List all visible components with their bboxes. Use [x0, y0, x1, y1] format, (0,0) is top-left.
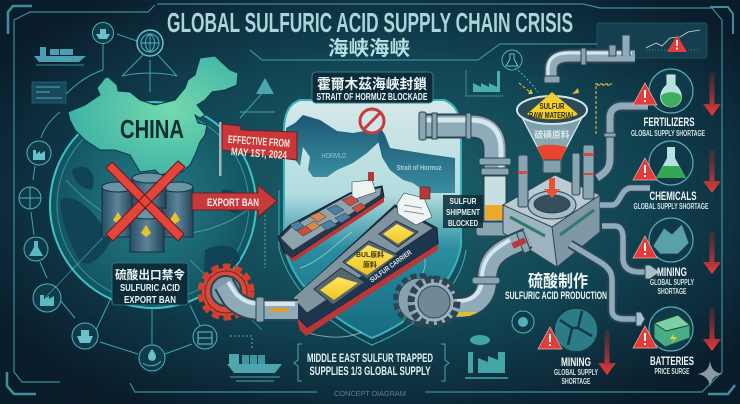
- label: sulfur shipment blocked: [443, 195, 483, 228]
- output: mining: [633, 218, 721, 296]
- label: MINING: [561, 357, 591, 369]
- icon: triangle hazard: [256, 78, 274, 94]
- container ship: [278, 172, 384, 262]
- icon: water hand node: [139, 345, 165, 371]
- containers: [290, 196, 366, 236]
- label: sulfuric acid production: [505, 271, 607, 302]
- flag: effective date: EFFECTIVE FROM: [228, 134, 290, 150]
- flag: effective date: MAY 1ST, 2024: [231, 146, 288, 162]
- arrow: export ban: [192, 185, 277, 217]
- arrow: down: [703, 73, 721, 116]
- pipe: mining: [602, 226, 660, 279]
- arrow: export ban: EXPORT BAN: [207, 197, 259, 209]
- icon: red X: [106, 161, 185, 241]
- label: sulfuric acid production: SULFURIC ACID PRODUCTION: [505, 290, 607, 302]
- pipes: output lines: [570, 106, 660, 326]
- label: FERTILIZERS: [644, 117, 695, 129]
- funnel: sulfur raw material: RAW MATERIAL: [529, 110, 575, 120]
- icon: factory top: [465, 70, 503, 96]
- icon: sparkle: [697, 361, 723, 387]
- label: [554, 357, 598, 386]
- icon: factory bottom: [465, 335, 508, 378]
- cargo hold: rear: [379, 221, 418, 247]
- network: left supply nodes: [19, 22, 282, 381]
- icon: tanker node: [72, 323, 98, 349]
- label: [650, 356, 694, 376]
- icon: cargo node: [193, 325, 217, 349]
- chimneys: [518, 145, 594, 207]
- label: sulfur shipment blocked: SULFUR: [450, 196, 476, 206]
- label: BATTERIES: [650, 356, 694, 368]
- icon: barrel back: [132, 173, 166, 208]
- output: chemicals: [633, 141, 721, 211]
- icon: chemical flask: [649, 141, 693, 185]
- subtitle: 海峡海峡: [328, 37, 410, 60]
- label: [650, 267, 694, 296]
- cargo hold: front: [314, 268, 365, 305]
- arrow: down: [703, 150, 721, 193]
- label: Hormuz: HORMUZ: [322, 153, 347, 160]
- pipe: chemicals: [600, 188, 650, 205]
- arrow: down: [703, 308, 721, 351]
- label: sulfur shipment blocked: SHIPMENT: [446, 207, 481, 217]
- hull name: SULFUR CARRIER: [369, 249, 413, 284]
- icon: warning: [667, 35, 687, 52]
- icon: document panel: [32, 82, 66, 103]
- icon: no-entry sign: [360, 109, 384, 133]
- oil barrels with red X: [102, 161, 193, 252]
- icon: flask node: [24, 237, 48, 261]
- label: Strait of Hormuz: Strait of Hormuz: [396, 165, 442, 172]
- icon: battery: [649, 307, 693, 351]
- icon: container ship bottom: [227, 354, 282, 381]
- icon: rocks: [649, 218, 693, 262]
- arrow: down: [598, 330, 616, 375]
- label: sulfuric acid production: 硫酸制作: [528, 271, 588, 291]
- label: sulfuric acid export ban: 硫酸出口禁令: [115, 267, 185, 282]
- caption: CONCEPT DIAGRAM: [334, 389, 406, 398]
- icon: warning: [633, 158, 657, 180]
- label: [634, 191, 709, 211]
- land: south coast: [378, 127, 455, 193]
- label: sulfuric acid export ban: SULFURIC ACID: [120, 282, 180, 294]
- icon: barrel front: [130, 209, 164, 252]
- icon: grey gear: [397, 277, 457, 325]
- pipe: reactor to gears: [434, 230, 531, 319]
- label: PRICE SURGE: [654, 367, 690, 376]
- cargo hold: centre: [343, 241, 398, 279]
- panel: price chart: [597, 23, 707, 58]
- icon: cracked rock: [554, 308, 598, 352]
- label: middle east sulfur trapped: [294, 344, 449, 381]
- pipe: hormuz top pipe: [419, 112, 514, 236]
- funnel: sulfur raw material: [517, 92, 587, 198]
- icon: flask circle: [502, 50, 522, 70]
- reactor block: [503, 145, 600, 267]
- reactor opening: [528, 191, 576, 219]
- icon: warning: [538, 327, 562, 349]
- label: sulfuric acid export ban: EXPORT BAN: [124, 294, 176, 306]
- label: CHEMICALS: [650, 191, 697, 203]
- panel: strait of Hormuz map: [279, 100, 466, 345]
- label: China: CHINA: [120, 114, 184, 144]
- label: SHORTAGE: [562, 377, 591, 386]
- icon: chemical plant node: [33, 284, 61, 312]
- pipe: fertilizers: [597, 106, 648, 178]
- cargo hold: centre: 原料: [363, 260, 377, 269]
- label: SHORTAGE: [658, 287, 687, 296]
- icon: globe node: [137, 30, 163, 56]
- map of China: [68, 56, 238, 175]
- label: strait of Hormuz blockade: [312, 72, 433, 103]
- icon: barrel right: [162, 182, 193, 237]
- pipe: gear to ship: [224, 282, 298, 322]
- label: [631, 117, 705, 138]
- icon: ship node: [92, 22, 114, 44]
- globe: [45, 102, 262, 330]
- flag: effective date: [219, 122, 297, 176]
- funnel: sulfur raw material: SULFUR: [540, 101, 564, 111]
- label: MINING: [657, 267, 687, 279]
- icon: warning: [633, 326, 657, 348]
- icon: factory node: [27, 141, 51, 165]
- icon: cargo ship top left: [34, 47, 86, 65]
- icon: barrel left: [102, 182, 133, 237]
- output: mining lower: [538, 308, 616, 386]
- output: fertilizers: [631, 69, 721, 138]
- land: north coast: [286, 115, 381, 177]
- icon: gear circle: [512, 311, 534, 333]
- icon: warning: [633, 83, 657, 105]
- label: sulfur shipment blocked: BLOCKED: [448, 218, 478, 228]
- icon: warning: [633, 236, 657, 258]
- output: batteries: [633, 307, 721, 376]
- label: sulfuric acid export ban: [112, 263, 188, 306]
- label: strait of Hormuz blockade: 霍爾木茲海峽封鎖: [317, 76, 427, 92]
- funnel: sulfur raw material: 硫磺原料: [534, 129, 570, 140]
- arrow: down: [703, 232, 721, 274]
- label: GLOBAL SUPPLY: [650, 278, 694, 287]
- icon: globe node lower: [19, 187, 41, 209]
- pipe: funnel feed: [544, 35, 635, 83]
- bulk sulfur carrier: [292, 187, 438, 336]
- label: strait of Hormuz blockade: STRAIT OF HORMUZ BLOCKADE: [316, 92, 428, 103]
- label: GLOBAL SUPPLY: [554, 368, 598, 377]
- pipe: batteries: [570, 244, 645, 326]
- icon: red gear: [202, 268, 250, 316]
- icon: fertilizer flask: [649, 69, 693, 113]
- label: middle east sulfur trapped: MIDDLE EAST SULFUR TRAPPED: [307, 353, 433, 365]
- cargo hold: centre: BUL原料: [356, 250, 384, 259]
- label: middle east sulfur trapped: SUPPLIES 1/3 GLOBAL SUPPLY: [310, 366, 431, 378]
- arrows: feed into funnel: [515, 68, 612, 134]
